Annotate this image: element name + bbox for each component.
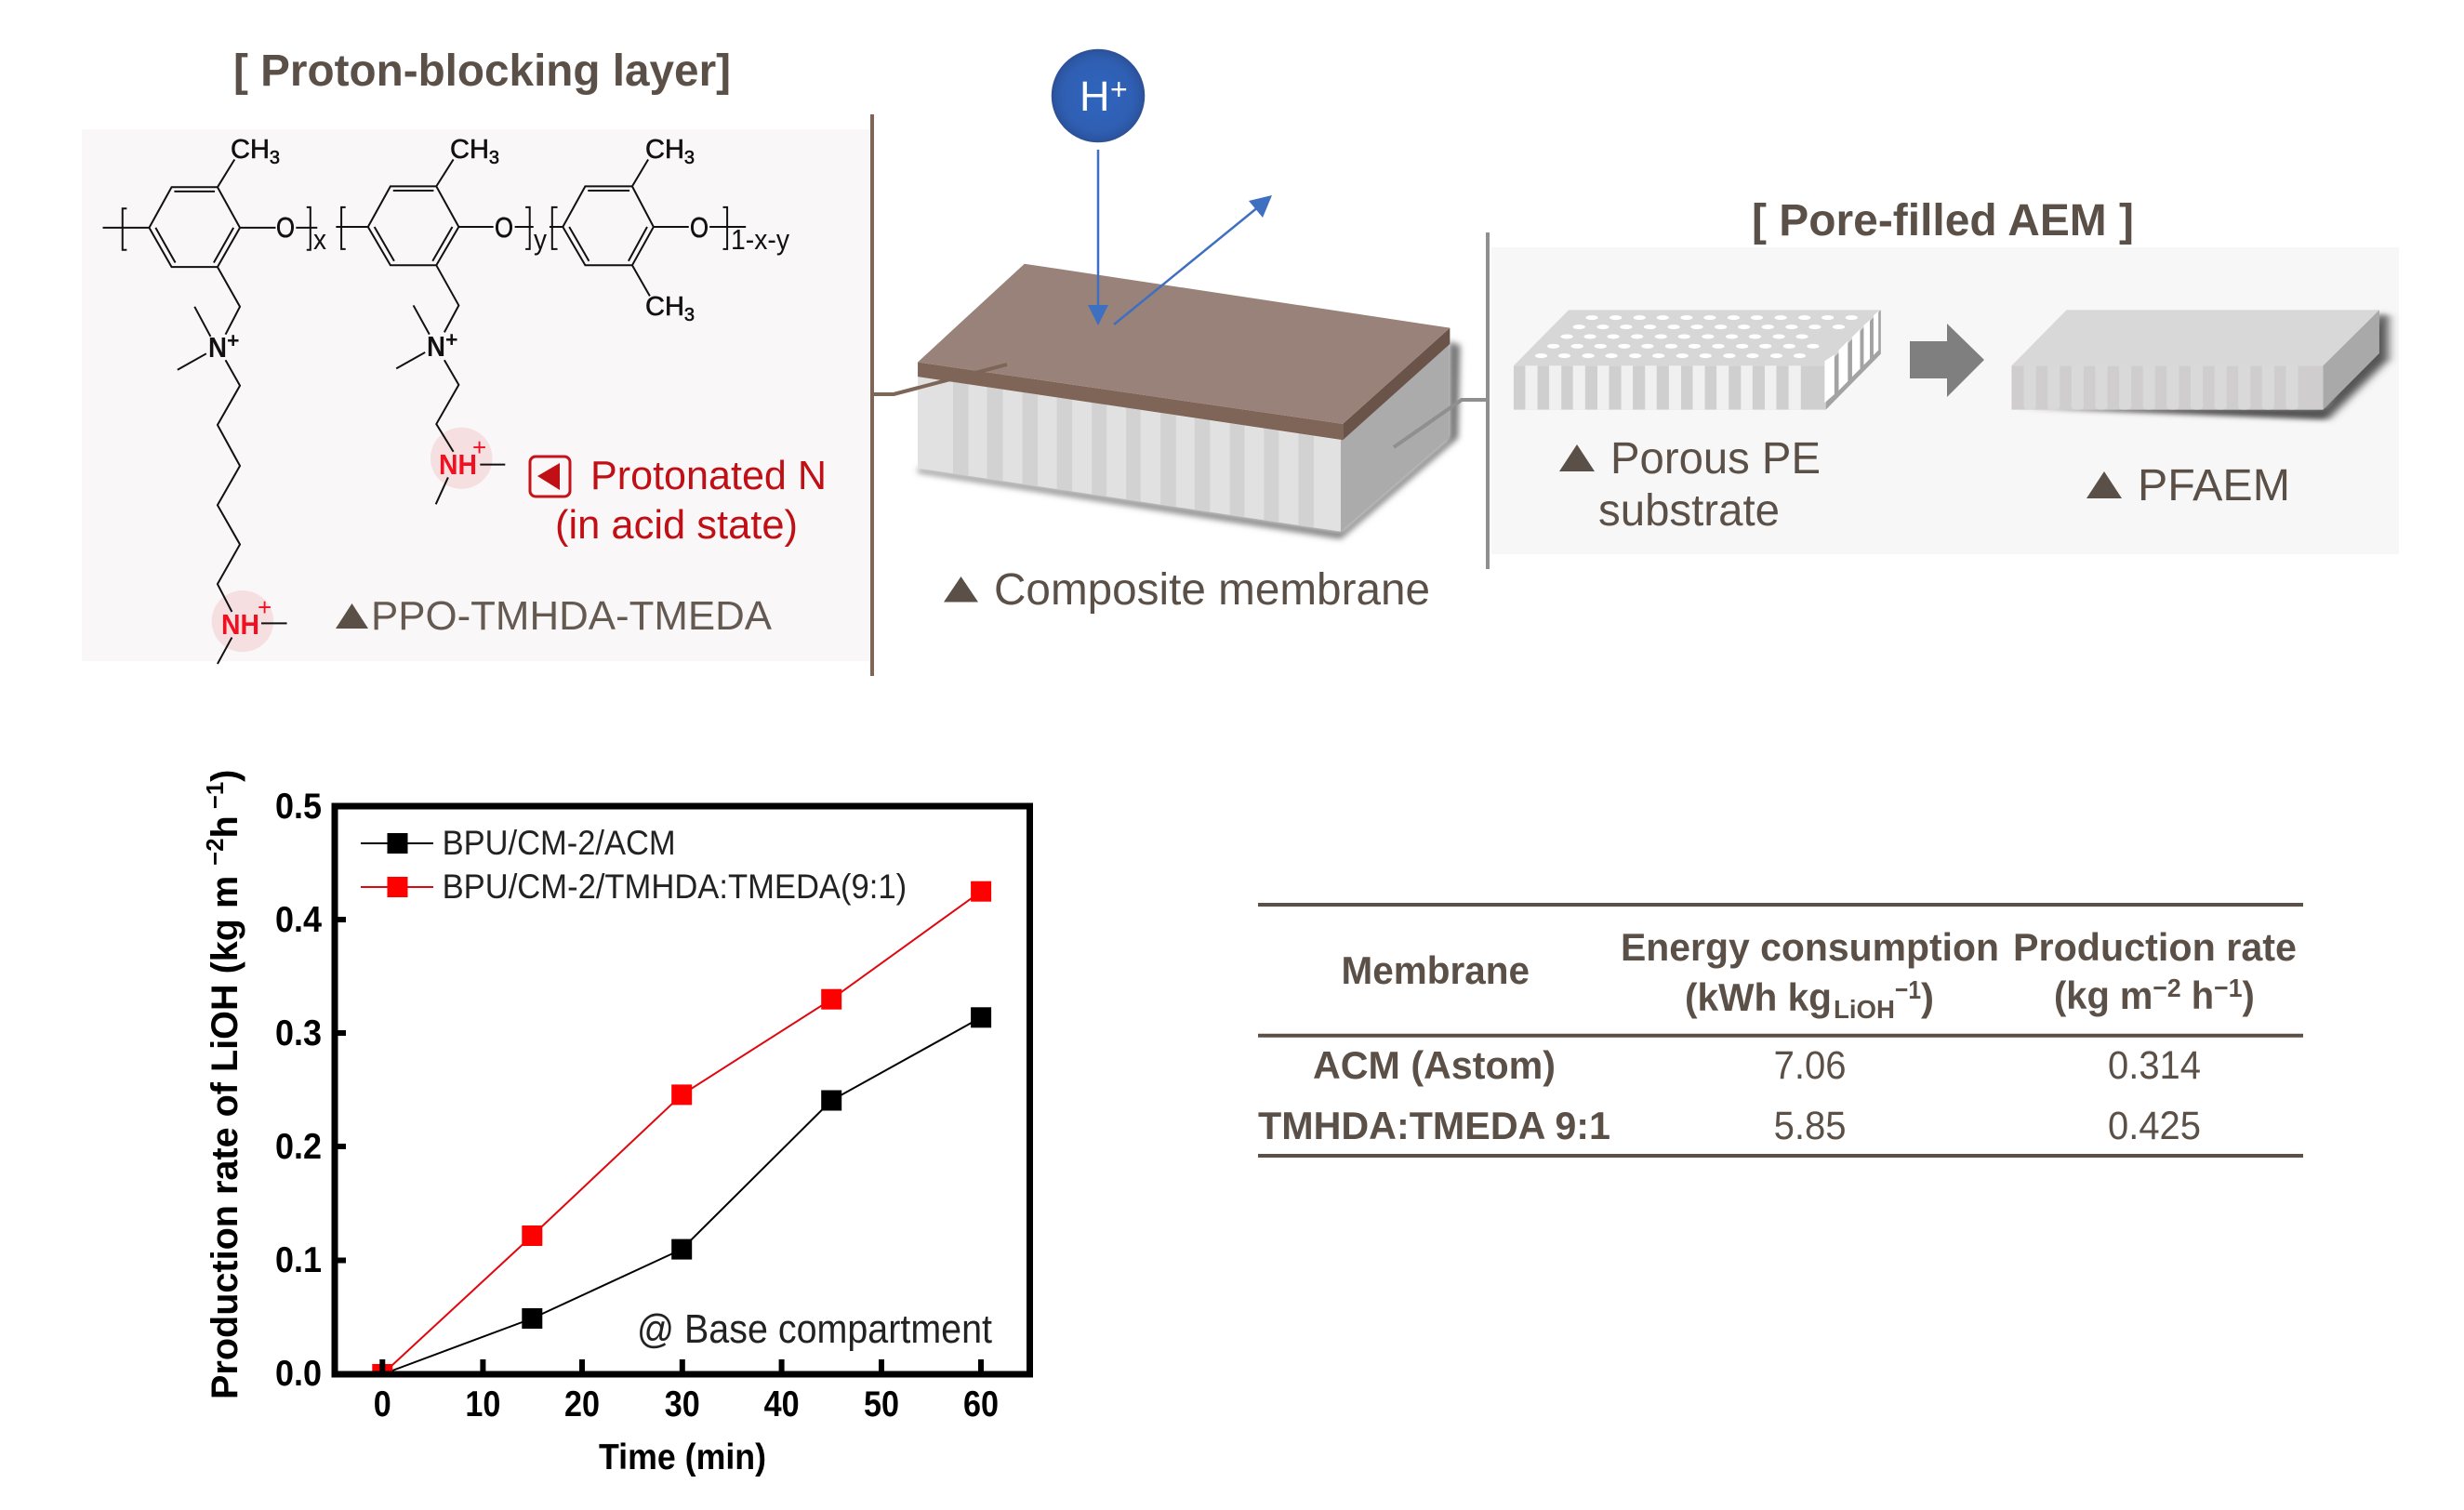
protonated NH labels: NH	[439, 448, 477, 481]
row: TMHDA:TMEDA 9:1: TMHDA:TMEDA 9:1	[1258, 1104, 1610, 1147]
chemical labels: x	[313, 223, 326, 256]
x-axis tick labels: 50	[864, 1384, 899, 1424]
y-axis tick labels: 0.0	[275, 1354, 322, 1394]
row: TMHDA:TMEDA 9:1	[1258, 1104, 2201, 1148]
chemical labels: N	[208, 331, 227, 364]
chemical labels: O	[495, 211, 513, 244]
protonated NH labels	[221, 433, 486, 641]
chemical labels: +	[227, 328, 239, 352]
callout: protonated N in acid state	[555, 453, 827, 548]
arrow: proton approach	[1088, 150, 1108, 325]
x-axis tick labels: 40	[764, 1384, 800, 1424]
heading: proton-blocking layer: [ Proton-blocking layer]	[233, 46, 731, 96]
x-axis title: Time (min)	[599, 1437, 766, 1477]
table header	[1341, 925, 2297, 1024]
PFAEM shadow	[2019, 313, 2389, 420]
connector: membrane to pore-filled AEM	[1394, 232, 1488, 569]
annotation: base compartment: @ Base compartment	[637, 1306, 992, 1352]
y-axis tick labels: 0.5	[275, 787, 322, 827]
substrate pores	[1535, 315, 1858, 358]
legend	[361, 824, 907, 906]
table header: )	[1921, 975, 1934, 1019]
x-axis tick labels: 20	[564, 1384, 600, 1424]
callout: protonated N in acid state: Protonated N	[590, 453, 827, 498]
icon: protonated N marker	[530, 457, 570, 497]
series: BPU/CM-2/ACM	[382, 1007, 991, 1374]
x-axis tick labels: 30	[665, 1384, 700, 1424]
substrate right face	[1826, 310, 1881, 410]
illustration: composite membrane	[918, 264, 1460, 538]
row: TMHDA:TMEDA 9:1: 5.85	[1774, 1104, 1847, 1148]
PFAEM right face	[2323, 310, 2379, 410]
row: ACM (Astom)	[1313, 1043, 2201, 1088]
caption: PPO-TMHDA-TMEDA: PPO-TMHDA-TMEDA	[371, 593, 773, 639]
table header: h	[2181, 974, 2214, 1017]
connector: proton-blocking layer to membrane	[872, 114, 1007, 676]
arrow: proton rejected	[1114, 195, 1272, 325]
substrate side channels	[1824, 311, 1878, 403]
legend: BPU/CM-2/ACM	[443, 824, 676, 862]
caption: PFAEM: PFAEM	[2138, 461, 2290, 510]
table header: Energy consumption	[1621, 925, 1999, 969]
table header: (kWh kg	[1685, 975, 1832, 1019]
y-axis tick labels: 0.2	[275, 1127, 322, 1167]
caption: porous PE substrate	[1559, 434, 1821, 536]
y-axis tick labels: 0.1	[275, 1240, 322, 1280]
block shadow	[918, 341, 1460, 538]
icon: H+ proton: +	[1110, 73, 1128, 106]
chemical labels: y	[534, 223, 547, 256]
chemical labels: CH	[645, 292, 684, 322]
icon: H+ proton	[1053, 50, 1144, 141]
x-axis tick labels	[374, 1384, 999, 1424]
chart: LiOH production rate vs time	[203, 770, 1030, 1477]
chemical labels	[208, 135, 789, 364]
chemical labels: 1-x-y	[731, 223, 789, 256]
chemical labels: CH	[450, 135, 489, 165]
brown layer front	[918, 363, 1343, 440]
caption: porous PE substrate: Porous PE	[1610, 434, 1821, 483]
protonated NH labels: NH	[221, 608, 259, 641]
PFAEM top face	[2011, 310, 2379, 365]
row: TMHDA:TMEDA 9:1: 0.425	[2108, 1104, 2201, 1148]
chemical structure bonds	[103, 159, 746, 664]
illustration: PFAEM block	[2011, 310, 2389, 420]
table header: −2	[2153, 973, 2181, 1002]
substrate top face	[1514, 310, 1881, 365]
chemical labels: 3	[270, 148, 280, 168]
y-axis title: Production rate of LiOH (kg m	[205, 876, 245, 1399]
y-axis title: h	[205, 815, 245, 838]
heading: pore-filled AEM: [ Pore-filled AEM ]	[1752, 196, 2134, 245]
block right face	[1341, 345, 1449, 532]
y-axis tick labels: 0.3	[275, 1013, 322, 1053]
chemical labels: CH	[231, 135, 270, 165]
y-axis title: −1	[203, 782, 229, 815]
brown layer top	[918, 264, 1450, 424]
callout: protonated N in acid state: (in acid state)	[555, 502, 798, 548]
substrate front face	[1514, 365, 1826, 410]
illustration: porous PE substrate	[1514, 310, 1881, 410]
x-axis tick labels: 10	[465, 1384, 500, 1424]
y-axis title: )	[205, 770, 245, 782]
table header: )	[2242, 974, 2255, 1017]
chemical labels: O	[690, 211, 709, 244]
y-axis tick labels	[275, 787, 322, 1394]
table header: LiOH	[1834, 995, 1895, 1024]
row: ACM (Astom): 0.314	[2108, 1043, 2201, 1088]
table header: Production rate	[2013, 925, 2297, 969]
table header: −1	[2214, 973, 2242, 1002]
chemical labels: O	[276, 211, 295, 244]
chemical labels: 3	[489, 148, 499, 168]
substrate front channels	[1525, 365, 1801, 410]
table header: (kg m	[2054, 974, 2153, 1017]
table: membrane performance	[1258, 905, 2303, 1156]
legend: BPU/CM-2/TMHDA:TMEDA(9:1)	[443, 868, 907, 906]
panel: proton-blocking layer chemical structure	[82, 129, 872, 664]
block front face	[918, 377, 1341, 532]
caption: porous PE substrate: substrate	[1598, 486, 1780, 536]
chemical labels: 3	[684, 148, 695, 168]
caption: composite membrane: Composite membrane	[994, 565, 1430, 615]
panel: pore-filled AEM background	[1491, 247, 2399, 554]
icon: H+ proton: H	[1080, 73, 1110, 120]
PFAEM filled pores	[2024, 364, 2298, 410]
chemical labels: +	[445, 327, 457, 351]
chemical labels: CH	[645, 135, 684, 165]
chart frame	[335, 806, 1030, 1374]
connector: proton-blocking callout over membrane	[894, 364, 1007, 394]
row: ACM (Astom): 7.06	[1774, 1043, 1847, 1088]
PFAEM front face	[2011, 365, 2323, 410]
protonated NH labels: +	[258, 593, 272, 621]
table rules	[1258, 905, 2303, 1156]
block front pores	[953, 382, 1314, 527]
protonated NH labels: +	[472, 433, 486, 461]
table header: −1	[1895, 975, 1921, 1004]
row: ACM (Astom): ACM (Astom)	[1313, 1043, 1556, 1087]
brown layer side	[1343, 328, 1450, 440]
table header: Membrane	[1341, 948, 1530, 992]
arrow: substrate to PFAEM	[1910, 324, 1984, 397]
series: BPU/CM-2/TMHDA:TMEDA(9:1)	[372, 881, 991, 1377]
chemical labels: 3	[684, 305, 695, 325]
axis ticks	[335, 920, 981, 1374]
y-axis title: −2	[203, 838, 229, 866]
y-axis tick labels: 0.4	[275, 900, 322, 940]
chemical labels: N	[427, 330, 445, 363]
highlight: protonated nitrogen circles	[212, 428, 493, 652]
x-axis tick labels: 60	[963, 1384, 999, 1424]
x-axis tick labels: 0	[374, 1384, 391, 1424]
